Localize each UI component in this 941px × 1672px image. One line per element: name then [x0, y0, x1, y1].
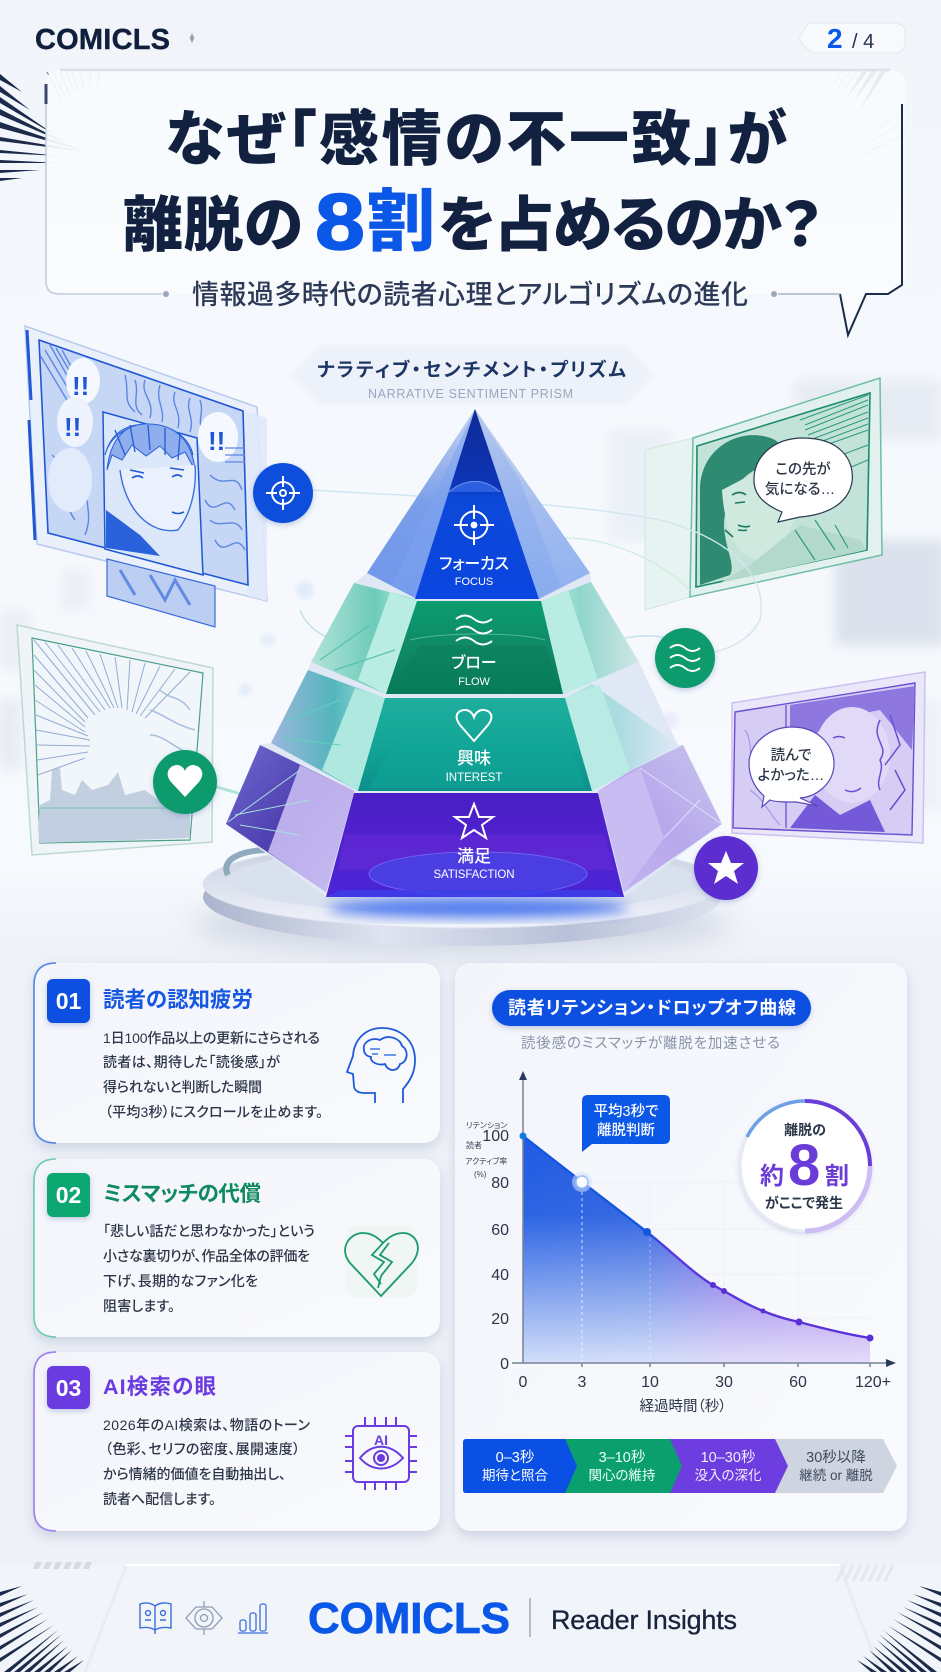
footer burst right [857, 1586, 941, 1672]
badge 01: 01 [56, 988, 81, 1014]
stage 3: 10–30秒 [701, 1449, 756, 1466]
icon: AI chip eye: AI [374, 1432, 388, 1448]
footer tagline: Reader Insights [551, 1605, 737, 1635]
header logo: COMICLS [35, 24, 170, 56]
heading 02: ミスマッチの代償 [103, 1182, 261, 1206]
background: blurred manga ghost panels [0, 380, 941, 810]
badge 03 [47, 1366, 90, 1409]
area under curve [523, 1136, 870, 1363]
prism heading: NARRATIVE SENTIMENT PRISM [368, 387, 573, 401]
interest front [358, 698, 592, 791]
subtitle: 情報過多時代の読者心理とアルゴリズムの進化 [192, 280, 748, 310]
x axis labels: 0 [519, 1374, 528, 1391]
icon: eye target [186, 1601, 222, 1635]
exclamation bubbles [57, 358, 238, 462]
prism heading: ナラティブ・センチメント・プリズム [317, 358, 627, 381]
glass backing [226, 409, 722, 897]
y axis title: 読者 [466, 1140, 482, 1150]
page indicator: / 4 [852, 31, 874, 53]
x axis labels: 30 [715, 1374, 733, 1391]
badge 02 [47, 1173, 90, 1217]
chart title pill [492, 990, 811, 1026]
chart title pill: 読者リテンション・ドロップオフ曲線 [508, 998, 796, 1018]
energy swirls [210, 490, 761, 815]
badge 03: 03 [56, 1375, 81, 1401]
callout: 8割 ring: 約 [760, 1163, 784, 1190]
exclamation bubbles: !! [208, 426, 225, 456]
callout: 8割 ring: 離脱の [784, 1122, 826, 1138]
x axis labels [519, 1374, 891, 1391]
flow label [451, 616, 497, 688]
page indicator: 2 [827, 23, 843, 54]
satisfaction sides [226, 745, 722, 892]
platform [192, 840, 732, 953]
stage 3: 没入の深化 [694, 1468, 762, 1483]
y axis title: (%) [474, 1170, 487, 1179]
satisfaction label: 満足 [457, 847, 491, 866]
speech bubble: 読んで: よかった… [758, 767, 824, 784]
y axis labels: 100 [482, 1128, 509, 1145]
manga panel: green girl [645, 378, 882, 610]
y axis labels: 60 [491, 1222, 509, 1239]
heading 03: AI検索の眼 [103, 1375, 216, 1399]
stage 1 [463, 1439, 577, 1493]
x axis labels: 3 [578, 1374, 587, 1391]
stage 4 [775, 1439, 897, 1493]
speech bubble: この先が [754, 438, 852, 522]
panel: retention chart [455, 963, 907, 1531]
footer [0, 1562, 941, 1672]
icon: AI chip eye [345, 1417, 417, 1490]
3s marker [572, 1172, 592, 1192]
y axis labels [482, 1128, 509, 1373]
satisfaction label: SATISFACTION [434, 869, 514, 881]
body 01: （平均3秒）にスクロールを止めます。 [105, 1104, 323, 1120]
stage 1: 期待と照合 [482, 1468, 548, 1483]
y axis title: アクティブ率 [465, 1156, 507, 1166]
stage 2: 3–10秒 [599, 1449, 646, 1466]
title: なぜ「感情の不一致」が [165, 106, 787, 173]
x axis labels: 120+ [855, 1374, 891, 1391]
stage 2: 関心の維持 [588, 1468, 656, 1483]
body 01: 1日100作品以上の更新にさらされる [103, 1030, 320, 1046]
callout: 8割 ring: 割 [825, 1163, 849, 1190]
focus label: フォーカス [439, 555, 509, 573]
manga panel: purple [732, 672, 925, 843]
icon: star badge [694, 836, 758, 900]
flow sides [311, 582, 639, 694]
interest label [446, 710, 502, 784]
title highlight: 割 [367, 184, 435, 260]
icon: target badge [253, 463, 313, 523]
badge 02: 02 [56, 1182, 81, 1208]
title highlight [315, 177, 435, 266]
body 01: 読者は、期待した「読後感」が [103, 1054, 280, 1070]
x axis labels: 10 [641, 1374, 659, 1391]
speech bubble: 読んで: 読んで [771, 747, 811, 764]
manga panel: green burst [17, 625, 213, 855]
focus label [439, 505, 509, 588]
title [123, 106, 787, 266]
title second line end: を占めるのか？ [438, 192, 822, 259]
body 01 [103, 1030, 323, 1120]
flow label: FLOW [458, 676, 491, 688]
x axis labels: 60 [789, 1374, 807, 1391]
speed lines around speech bubble [0, 70, 905, 181]
speech bubble: 読んで [749, 727, 834, 807]
flow label: ブロー [451, 653, 497, 672]
title: 離脱の [123, 192, 303, 259]
icon: broken heart [345, 1226, 418, 1298]
title highlight: 8 [315, 177, 365, 266]
icon: heart badge [153, 750, 217, 814]
focus front [415, 409, 539, 599]
callout: 8割 ring: 8 [788, 1133, 820, 1198]
footer logo: COMICLS [308, 1594, 510, 1643]
body 03: 読者へ配信します。 [103, 1491, 216, 1507]
body 02: 下げ、長期的なファン化を [103, 1273, 258, 1289]
card 02 [34, 1159, 440, 1337]
callout: 8割 ring: がここで発生 [765, 1195, 843, 1211]
prism heading [291, 346, 654, 405]
icon: wave badge [655, 628, 715, 688]
body 03: から情緒的価値を自動抽出し、 [103, 1466, 286, 1482]
body 03 [103, 1417, 311, 1507]
icon: bar chart [238, 1604, 268, 1633]
axes [512, 1076, 890, 1367]
y axis labels: 80 [491, 1175, 509, 1192]
body 03: 2026年のAI検索は、物語のトーン [103, 1417, 311, 1433]
callout: 8割 ring [740, 1101, 870, 1231]
badge 01 [47, 979, 90, 1023]
callout: 3 seconds: 平均3秒で [594, 1103, 659, 1120]
y axis title [465, 1121, 508, 1179]
stage 3 [670, 1439, 788, 1493]
satisfaction label [434, 804, 514, 881]
callout: 3 seconds [582, 1095, 670, 1152]
x axis title: 経過時間（秒） [640, 1398, 726, 1415]
stage 4: 30秒以降 [806, 1449, 866, 1466]
prism [226, 409, 722, 897]
chart: retention curve [465, 1071, 896, 1415]
body 02 [103, 1223, 315, 1314]
stage arrows [463, 1439, 897, 1493]
footer burst left [0, 1586, 84, 1672]
exclamation bubbles: !! [64, 412, 81, 442]
interest label: INTEREST [446, 772, 502, 784]
focus label: FOCUS [455, 576, 493, 588]
stage 2 [565, 1439, 682, 1493]
callout: 3 seconds: 離脱判断 [597, 1122, 655, 1139]
body 02: 阻害します。 [103, 1298, 175, 1314]
icon: book [140, 1603, 171, 1634]
page indicator [799, 23, 905, 54]
satisfaction front [326, 793, 624, 897]
y axis title: リテンション [466, 1121, 508, 1130]
stage 1: 0–3秒 [496, 1449, 535, 1466]
speech bubble: この先が: この先が [775, 460, 831, 478]
flow front [386, 601, 563, 694]
y axis labels: 0 [500, 1356, 509, 1373]
title speech bubble [46, 70, 905, 335]
speech bubble: この先が: 気になる… [765, 481, 835, 498]
icon: brain head [347, 1028, 415, 1103]
heading 01: 読者の認知疲労 [103, 988, 253, 1012]
stage 4: 継続 or 離脱 [799, 1467, 873, 1483]
exclamation bubbles: !! [72, 371, 89, 401]
y axis labels: 40 [491, 1267, 509, 1284]
card 03 [34, 1352, 440, 1531]
body 02: 「悲しい話だと思わなかった」という [103, 1223, 315, 1239]
body 03: （色彩、セリフの密度、展開速度） [105, 1441, 300, 1457]
interest label: 興味 [457, 749, 491, 768]
chart subtitle: 読後感のミスマッチが離脱を加速させる [521, 1035, 780, 1052]
manga panel: blue [25, 326, 267, 627]
data points [520, 1132, 874, 1342]
card 01 [34, 963, 440, 1143]
interest sides [271, 670, 678, 791]
focus sides [367, 409, 590, 599]
body 01: 得られないと判断した瞬間 [103, 1079, 262, 1095]
y axis labels: 20 [491, 1311, 509, 1328]
body 02: 小さな裏切りが、作品全体の評価を [103, 1248, 310, 1264]
